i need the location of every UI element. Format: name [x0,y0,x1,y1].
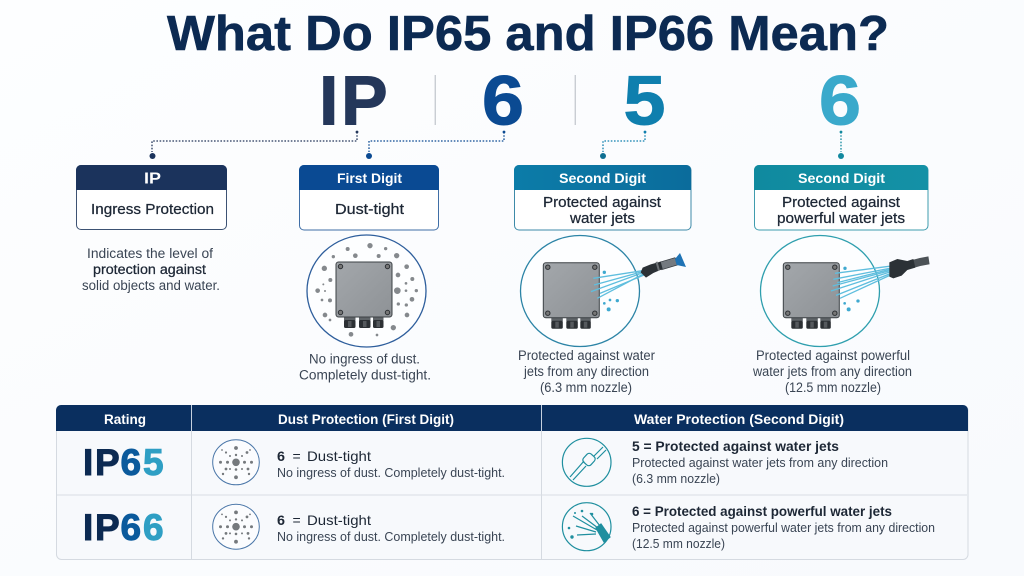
table header: Rating: Rating [104,412,146,427]
row 2 water text [632,504,935,551]
row: IP66 rating [83,507,164,548]
connector: IP [150,131,358,159]
text: IP description [82,246,220,293]
row: IP65 rating: P [95,442,120,483]
icon: enclosure with powerful water jet [760,236,929,346]
comparison table [56,405,968,560]
big code: IP 6 5 6: 6 [819,62,861,140]
row 1 dust text [277,448,505,480]
powerful water jet [831,266,893,311]
row 2 dust text [277,512,505,544]
big code: IP 6 5 6 [319,62,861,140]
heading: Second Digit: Second Digit [559,170,646,186]
water jet [591,271,644,311]
row: IP66 rating: I [83,507,93,548]
icon: enclosure with water jet [520,236,686,346]
row 1 water text: Protected against water jets from any direction [632,456,888,470]
hose nozzle [889,259,929,278]
panel: second digit powerful water jets [754,165,928,230]
label: powerful water jets: powerful water jets [777,211,905,227]
row 1 dust text: = [292,448,301,464]
row 1 dust text: Dust-tight [307,448,371,464]
row: IP65 rating: 5 [143,442,164,483]
row: IP66 rating: 6 [143,507,164,548]
label: water jets [543,195,661,227]
enclosure box [543,263,599,329]
row: IP65 rating [83,442,164,483]
label: powerful water jets: Protected against [782,195,900,211]
text: powerful jets caption: (12.5 mm nozzle) [785,380,881,395]
text: water jets caption: Protected against water [518,348,655,363]
enclosure box [336,262,392,328]
row: IP65 rating: 6 [120,442,141,483]
dust particles [315,243,418,337]
text: dust caption: Completely dust-tight. [299,368,431,382]
text: water jets caption: jets from any direction [523,364,649,379]
panel: second digit water jets [514,165,691,230]
connector: second digit 6 [838,131,844,159]
row 2 dust text: Dust-tight [307,512,371,528]
icon: dust row 1 [213,440,259,485]
connector: first digit [366,131,505,159]
heading: IP: IP [144,170,161,188]
panel: first digit [299,165,439,230]
row 2 water text: (12.5 mm nozzle) [632,537,725,551]
text: dust caption [299,352,431,382]
label: Dust-tight: Dust-tight [335,202,404,218]
icon: water jet row 1 [562,438,611,486]
row 2 water text: 6 = Protected against powerful water jets [632,504,892,519]
row 1 dust text: No ingress of dust. Completely dust-tight. [277,466,505,480]
panel: IP [76,165,227,230]
row: IP66 rating: P [95,507,120,548]
row 2 dust text: 6 [277,512,285,528]
big code: IP 6 5 6: P [341,62,388,140]
row 2 water text: Protected against powerful water jets from any direction [632,521,935,535]
icon: powerful water jet row 2 [562,503,611,551]
row 1 water text: (6.3 mm nozzle) [632,472,720,486]
text: dust caption: No ingress of dust. [309,352,420,366]
row: IP66 rating: 6 [120,507,141,548]
big code: IP 6 5 6: 5 [624,62,666,140]
row 2 dust text: = [292,512,301,528]
row 1 water text [632,439,888,486]
table header: Dust Protection: Dust Protection (First Digit) [278,412,454,427]
connector: second digit 5 [600,131,646,159]
title: What Do IP65 and IP66 Mean? [167,7,889,61]
text: powerful jets caption: Protected against powerful [756,348,910,363]
nozzle [641,253,686,278]
text: IP description: Indicates the level of [87,246,213,261]
big code: IP 6 5 6: 6 [482,62,524,140]
row 1 water text: 5 = Protected against water jets [632,439,839,454]
text: IP description: solid objects and water. [82,278,220,293]
label: water jets: Protected against [543,195,661,211]
text: water jets caption: (6.3 mm nozzle) [540,380,632,395]
row 1 dust text: 6 [277,448,285,464]
text: powerful jets caption: water jets from any direction [752,364,912,379]
label: powerful water jets [777,195,905,227]
label: water jets: water jets [569,211,635,227]
heading: Second Digit: Second Digit [798,170,885,186]
heading: First Digit: First Digit [337,170,402,186]
enclosure box [783,263,839,329]
table header: Water Protection: Water Protection (Second Digit) [634,412,844,427]
text: powerful jets caption [752,348,912,395]
text: water jets caption [518,348,655,395]
label: Ingress Protection: Ingress Protection [91,202,214,218]
row 2 dust text: No ingress of dust. Completely dust-tight. [277,530,505,544]
row: IP65 rating: I [83,442,93,483]
big code: IP 6 5 6: I [319,62,338,140]
icon: dust-tight enclosure [307,235,426,347]
icon: dust row 2 [213,504,259,549]
text: IP description: protection against [93,262,206,277]
